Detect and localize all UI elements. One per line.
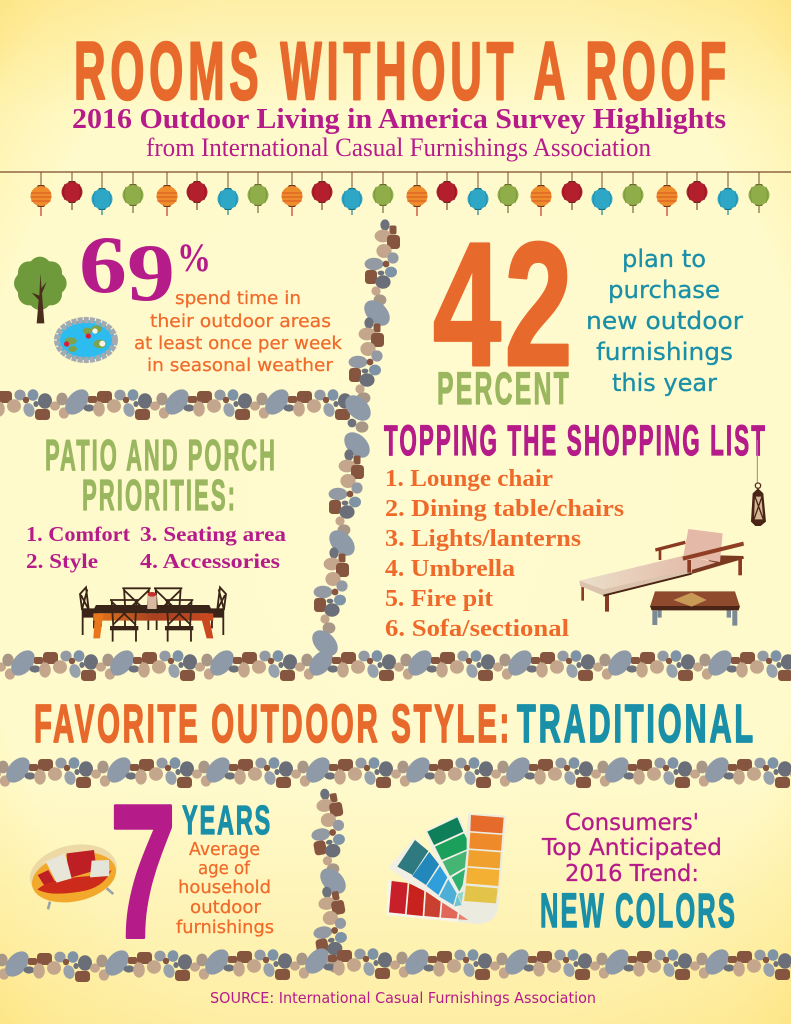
heading: patio and porch: PRIORITIES:	[82, 471, 237, 520]
list: priorities: 2. Style	[26, 549, 98, 573]
list: shopping items: 5. Fire pit	[385, 586, 493, 612]
list: priorities: 1. Comfort	[26, 522, 130, 546]
text: plan to purchase: purchase	[608, 276, 720, 304]
icon: dining set	[80, 587, 226, 642]
list: priorities: 3. Seating area	[140, 522, 287, 546]
text: average age: outdoor	[190, 897, 262, 918]
stat: 69 percent: 9	[127, 227, 175, 318]
text: average age	[176, 839, 274, 938]
icon: red sofa	[25, 837, 122, 910]
stat: 7: 7	[110, 766, 176, 978]
text: consumers trend	[541, 810, 722, 887]
stat label: years: YEARS	[182, 797, 272, 843]
text: consumers trend: Top Anticipated	[541, 835, 722, 861]
text: plan to purchase: furnishings	[596, 338, 733, 366]
stat: 42: 42	[433, 207, 576, 403]
icon: chaise lounge	[579, 529, 744, 612]
list: shopping items: 2. Dining table/chairs	[385, 496, 624, 522]
stat: 69 percent	[79, 219, 211, 318]
text: spend time: their outdoor areas	[150, 311, 331, 332]
stone path: row 2	[0, 646, 791, 681]
list: shopping items: 4. Umbrella	[385, 556, 515, 582]
infographic: PATIO AND PORCH	[45, 431, 277, 480]
text: plan to purchase: new outdoor	[586, 307, 743, 335]
text: plan to purchase: plan to	[622, 245, 706, 273]
icon: colour swatch fan	[387, 813, 506, 924]
list: shopping items: 6. Sofa/sectional	[385, 616, 569, 642]
text: spend time: at least once per week	[134, 333, 343, 354]
string of lanterns	[0, 172, 791, 216]
source organisation line: from International Casual Furnishings Association	[146, 133, 651, 162]
icon: hanging lantern	[751, 440, 766, 526]
stone path: row 3	[0, 753, 791, 788]
text: spend time: in seasonal weather	[147, 355, 334, 376]
text: average age: Average	[189, 839, 260, 860]
stone path: column 1	[340, 219, 400, 433]
text: spend time	[134, 288, 343, 376]
stat: 69 percent: 6	[79, 219, 127, 310]
stone path: column 3	[304, 786, 356, 975]
source: SOURCE: International Casual Furnishings Association	[210, 989, 596, 1007]
stat: 69 percent: %	[177, 235, 211, 280]
text: average age: furnishings	[176, 917, 274, 938]
text: average age: household	[178, 877, 271, 898]
stone path: column 2	[307, 427, 375, 661]
text: plan to purchase: this year	[612, 369, 717, 397]
list: shopping items: 3. Lights/lanterns	[385, 526, 581, 552]
icon: pond	[57, 320, 115, 360]
icon: tree	[14, 257, 67, 323]
list: priorities: 4. Accessories	[140, 549, 280, 573]
list: shopping items: 1. Lounge chair	[385, 466, 553, 492]
heading: patio and porch	[45, 431, 277, 520]
stat label: percent: PERCENT	[437, 363, 571, 414]
text: spend time: spend time in	[175, 288, 301, 309]
text: consumers trend: 2016 Trend:	[565, 861, 699, 887]
list: shopping items	[385, 466, 624, 642]
text: average age: age of	[198, 858, 251, 879]
text: plan to purchase	[586, 245, 743, 397]
text: consumers trend: Consumers'	[565, 810, 699, 836]
stone path: row 4	[0, 944, 791, 982]
subtitle: 2016 Outdoor Living in America Survey Highlights	[72, 104, 726, 135]
icon: coffee table	[650, 591, 740, 626]
stone path: row 1	[0, 385, 369, 420]
list: priorities	[26, 522, 287, 573]
